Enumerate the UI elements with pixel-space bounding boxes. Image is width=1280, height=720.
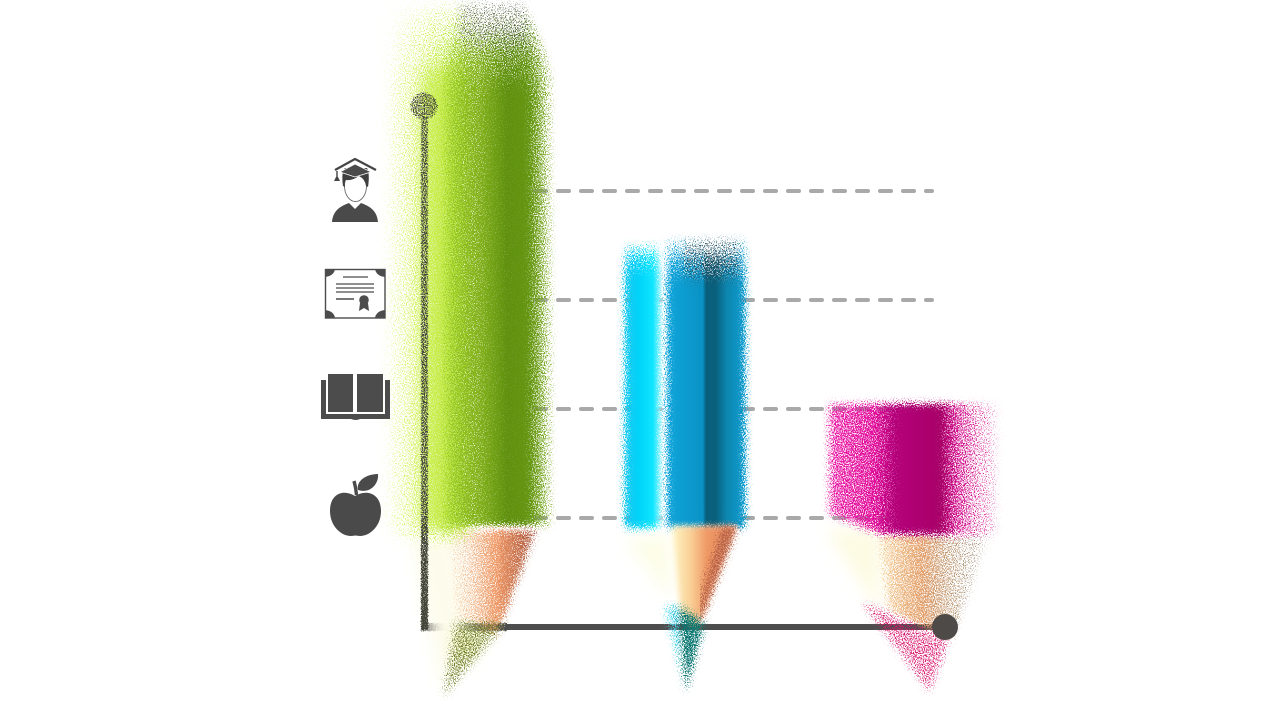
icon: open book — [321, 374, 390, 420]
pencil: magenta bar — [815, 395, 1005, 700]
pencil: green bar — [375, 0, 560, 705]
dashed gridlines — [535, 191, 932, 518]
vertical axis — [410, 92, 438, 631]
horizontal axis — [420, 622, 932, 632]
icon: apple — [330, 474, 381, 536]
icon: graduate — [332, 159, 378, 222]
pencil: blue bar — [610, 232, 760, 698]
icon: certificate — [325, 269, 385, 318]
axis end point — [932, 614, 958, 640]
